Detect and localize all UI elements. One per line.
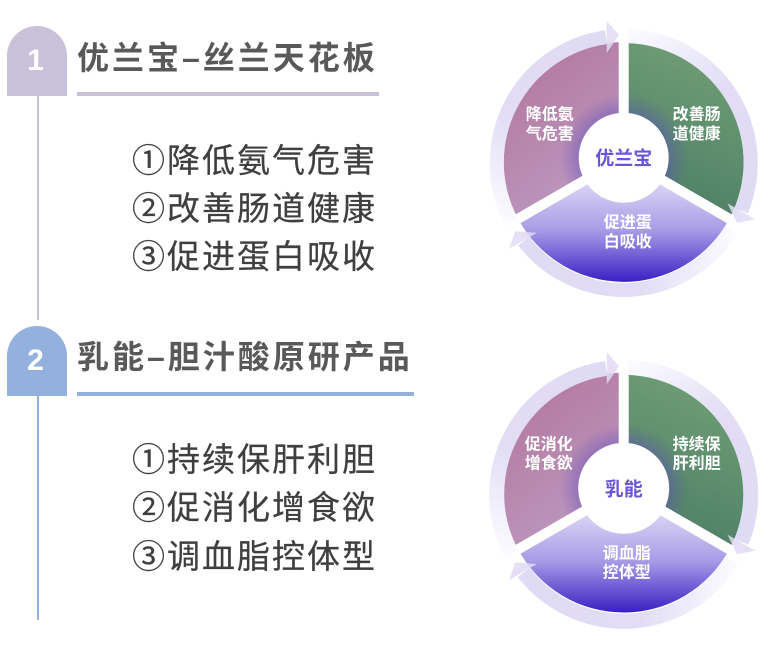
ring arrow: right (574, 23, 782, 230)
list item: ①降低氨气危害 (132, 142, 377, 179)
centre circle (578, 443, 669, 534)
list item: ③调血脂控体型 (132, 538, 377, 575)
segment: 降低氨气危害 (504, 42, 624, 219)
ring arrow: top (497, 21, 619, 223)
section 2: 乳能 (7, 326, 414, 620)
label: 改善肠道健康: 改善肠 (673, 107, 721, 124)
heading 1: 优兰宝–丝兰天花板 (77, 40, 378, 76)
label: 降低氨气危害: 降低氨 (526, 107, 574, 124)
segment: 调血脂控体型 (518, 488, 729, 612)
connector line 1 (37, 96, 39, 320)
label: 促进蛋白吸收: 白吸收 (604, 233, 652, 251)
connector line 2 (37, 396, 39, 620)
heading underline 2 (77, 392, 414, 396)
list item: ②改善肠道健康 (132, 190, 377, 227)
centre circle: 乳能 (605, 478, 643, 500)
label: 降低氨气危害: 气危害 (526, 124, 574, 143)
label: 持续保肝利胆: 持续保 (673, 436, 721, 453)
list item: ②促消化增食欲 (132, 489, 377, 526)
ring arrow: top (497, 352, 619, 554)
label: 改善肠道健康: 道健康 (673, 124, 721, 143)
benefit list 2 (132, 441, 377, 575)
number badge 1 (7, 26, 67, 96)
centre circle (579, 113, 669, 203)
label: 调血脂控体型: 调血脂 (603, 545, 651, 562)
ring arrow: bottom-left (503, 469, 739, 669)
heading underline 1 (77, 92, 379, 96)
label: 促进蛋白吸收: 促进蛋 (604, 215, 652, 232)
label: 促消化增食欲: 增食欲 (525, 453, 573, 472)
list item: ③促进蛋白吸收 (132, 238, 377, 275)
segment: 促进蛋白吸收 (518, 158, 729, 282)
label: 促消化增食欲: 促消化 (525, 436, 573, 453)
ring arrow: bottom-left (503, 137, 739, 344)
segment: 改善肠道健康 (624, 42, 744, 219)
list item: ①持续保肝利胆 (132, 441, 377, 478)
number badge 2 (7, 326, 67, 396)
number badge 1: 1 (27, 44, 44, 77)
segment: 促消化增食欲 (504, 373, 624, 549)
section 1: 优兰宝 (7, 26, 379, 320)
number badge 2: 2 (27, 344, 44, 377)
benefit list 1 (132, 142, 377, 275)
centre circle: 优兰宝 (595, 147, 652, 170)
ring arrow: right (574, 355, 782, 561)
heading 2: 乳能–胆汁酸原研产品 (77, 339, 413, 375)
label: 调血脂控体型: 控体型 (603, 562, 651, 581)
segment: 持续保肝利胆 (624, 373, 744, 549)
label: 持续保肝利胆: 肝利胆 (673, 454, 721, 472)
